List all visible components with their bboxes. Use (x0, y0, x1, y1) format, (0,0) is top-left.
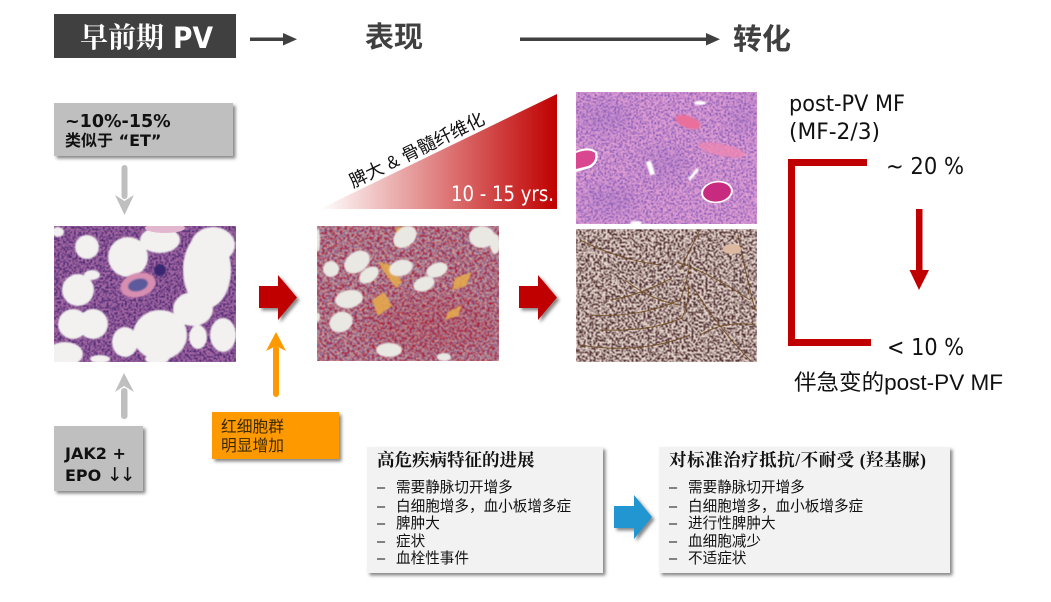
heading: early PV (54, 14, 236, 58)
bullet list: – (669, 551, 678, 567)
arrow: manifestation to transformation (520, 33, 720, 46)
heading: early PV: PV (173, 21, 214, 55)
bullet list: – (669, 480, 678, 496)
arrow: early PV to manifestation (250, 33, 297, 46)
label: about 20 percent: ~ 20 % (886, 154, 964, 180)
bullet list: 白细胞增多，血小板增多症 (688, 497, 864, 515)
heading: early PV: 早前期 (80, 22, 164, 54)
rotated label: splenomegaly and marrow fibrosis: 脾大 & 骨髓纤维化 (346, 109, 488, 192)
bullet list: – (377, 534, 386, 550)
callout: JAK2 and EPO (54, 426, 143, 491)
label: post-PV MF: (MF-2/3) (789, 119, 880, 145)
callout: 10-15 percent similar to ET: ~10%-15% (65, 112, 171, 132)
panel title: 对标准治疗抵抗/不耐受 (羟基脲) (669, 450, 926, 470)
panel: resistance or intolerance to standard therapy (659, 447, 950, 573)
bullet list: 进行性脾肿大 (688, 515, 776, 532)
heading: manifestation: 表现 (365, 21, 423, 54)
label: under 10 percent: < 10 % (887, 335, 964, 361)
micrograph: post-PV MF H&E (576, 92, 757, 224)
label: post-PV MF: post-PV MF (789, 91, 905, 117)
arrow: grey down (115, 165, 134, 215)
micrograph: post-PV MF reticulin fibrosis (576, 229, 757, 362)
arrow: red, to manifestation marrow (259, 275, 297, 320)
arrow: red down (910, 209, 929, 290)
bullet list: – (377, 499, 386, 515)
bullet list: 白细胞增多，血小板增多症 (396, 497, 572, 515)
label: post-PV MF with blast transformation: 伴急变的post-PV MF (794, 370, 1003, 395)
callout: marked erythrocytosis: 红细胞群 (221, 418, 284, 436)
micrograph: manifestation bone marrow (317, 226, 499, 361)
callout: 10-15 percent similar to ET (54, 103, 233, 156)
bullet list: 不适症状 (688, 550, 747, 567)
bullet list: – (377, 551, 386, 567)
bullet list: 脾肿大 (396, 515, 440, 532)
arrow: red, to transformation (519, 275, 557, 320)
arrow: orange up (266, 332, 286, 397)
callout: JAK2 and EPO: EPO ↓↓ (65, 464, 133, 486)
bullet list: 症状 (396, 533, 426, 550)
micrograph: early PV bone marrow (54, 226, 236, 362)
bullet list: – (669, 534, 678, 550)
arrow: grey up (115, 373, 134, 419)
panel title: 高危疾病特征的进展 (377, 450, 535, 470)
heading: transformation: 转化 (733, 23, 791, 56)
bullet list (669, 479, 864, 567)
panel: high-risk progression (367, 447, 603, 573)
bullet list: 血栓性事件 (396, 550, 469, 567)
bullet list: – (669, 516, 678, 532)
arrow: blue right (614, 495, 652, 539)
bullet list (377, 479, 572, 567)
callout: marked erythrocytosis: 明显增加 (221, 437, 284, 455)
bullet list: – (669, 499, 678, 515)
bullet list: 需要静脉切开增多 (396, 479, 513, 496)
bracket: transformation range (792, 162, 871, 342)
bullet list: 血细胞减少 (688, 533, 761, 550)
bullet list: – (377, 480, 386, 496)
bullet list: 需要静脉切开增多 (688, 479, 805, 496)
gradient triangle: 10 to 15 years (320, 94, 557, 209)
gradient triangle: 10 to 15 years: 10 - 15 yrs. (451, 182, 554, 207)
callout: 10-15 percent similar to ET: 类似于 “ET” (65, 131, 161, 150)
bullet list: – (377, 516, 386, 532)
callout: JAK2 and EPO: JAK2 + (64, 444, 126, 463)
callout: marked erythrocytosis (212, 412, 339, 459)
